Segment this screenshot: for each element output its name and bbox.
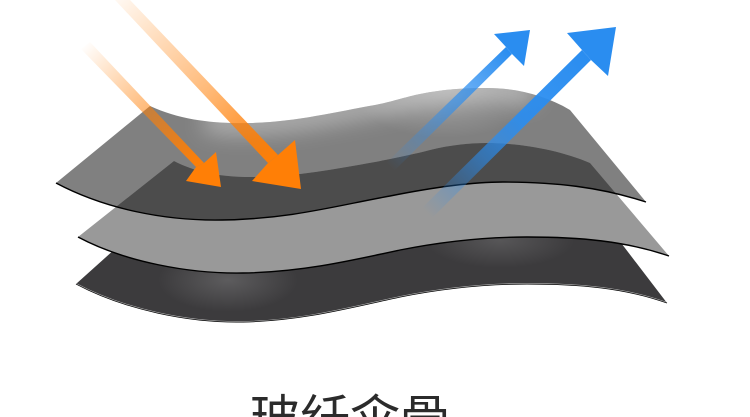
bottom dark sheet — [76, 238, 666, 322]
arrow: orange small incoming — [81, 42, 221, 187]
top translucent sheet — [56, 88, 646, 206]
arrow: blue small outgoing — [386, 30, 530, 171]
middle light gray sheet — [78, 143, 669, 273]
arrow: orange large incoming — [115, 0, 301, 189]
arrow: blue large outgoing — [422, 27, 616, 218]
sheet overlap dark region — [117, 143, 616, 220]
sheet bottom edges — [56, 182, 669, 322]
